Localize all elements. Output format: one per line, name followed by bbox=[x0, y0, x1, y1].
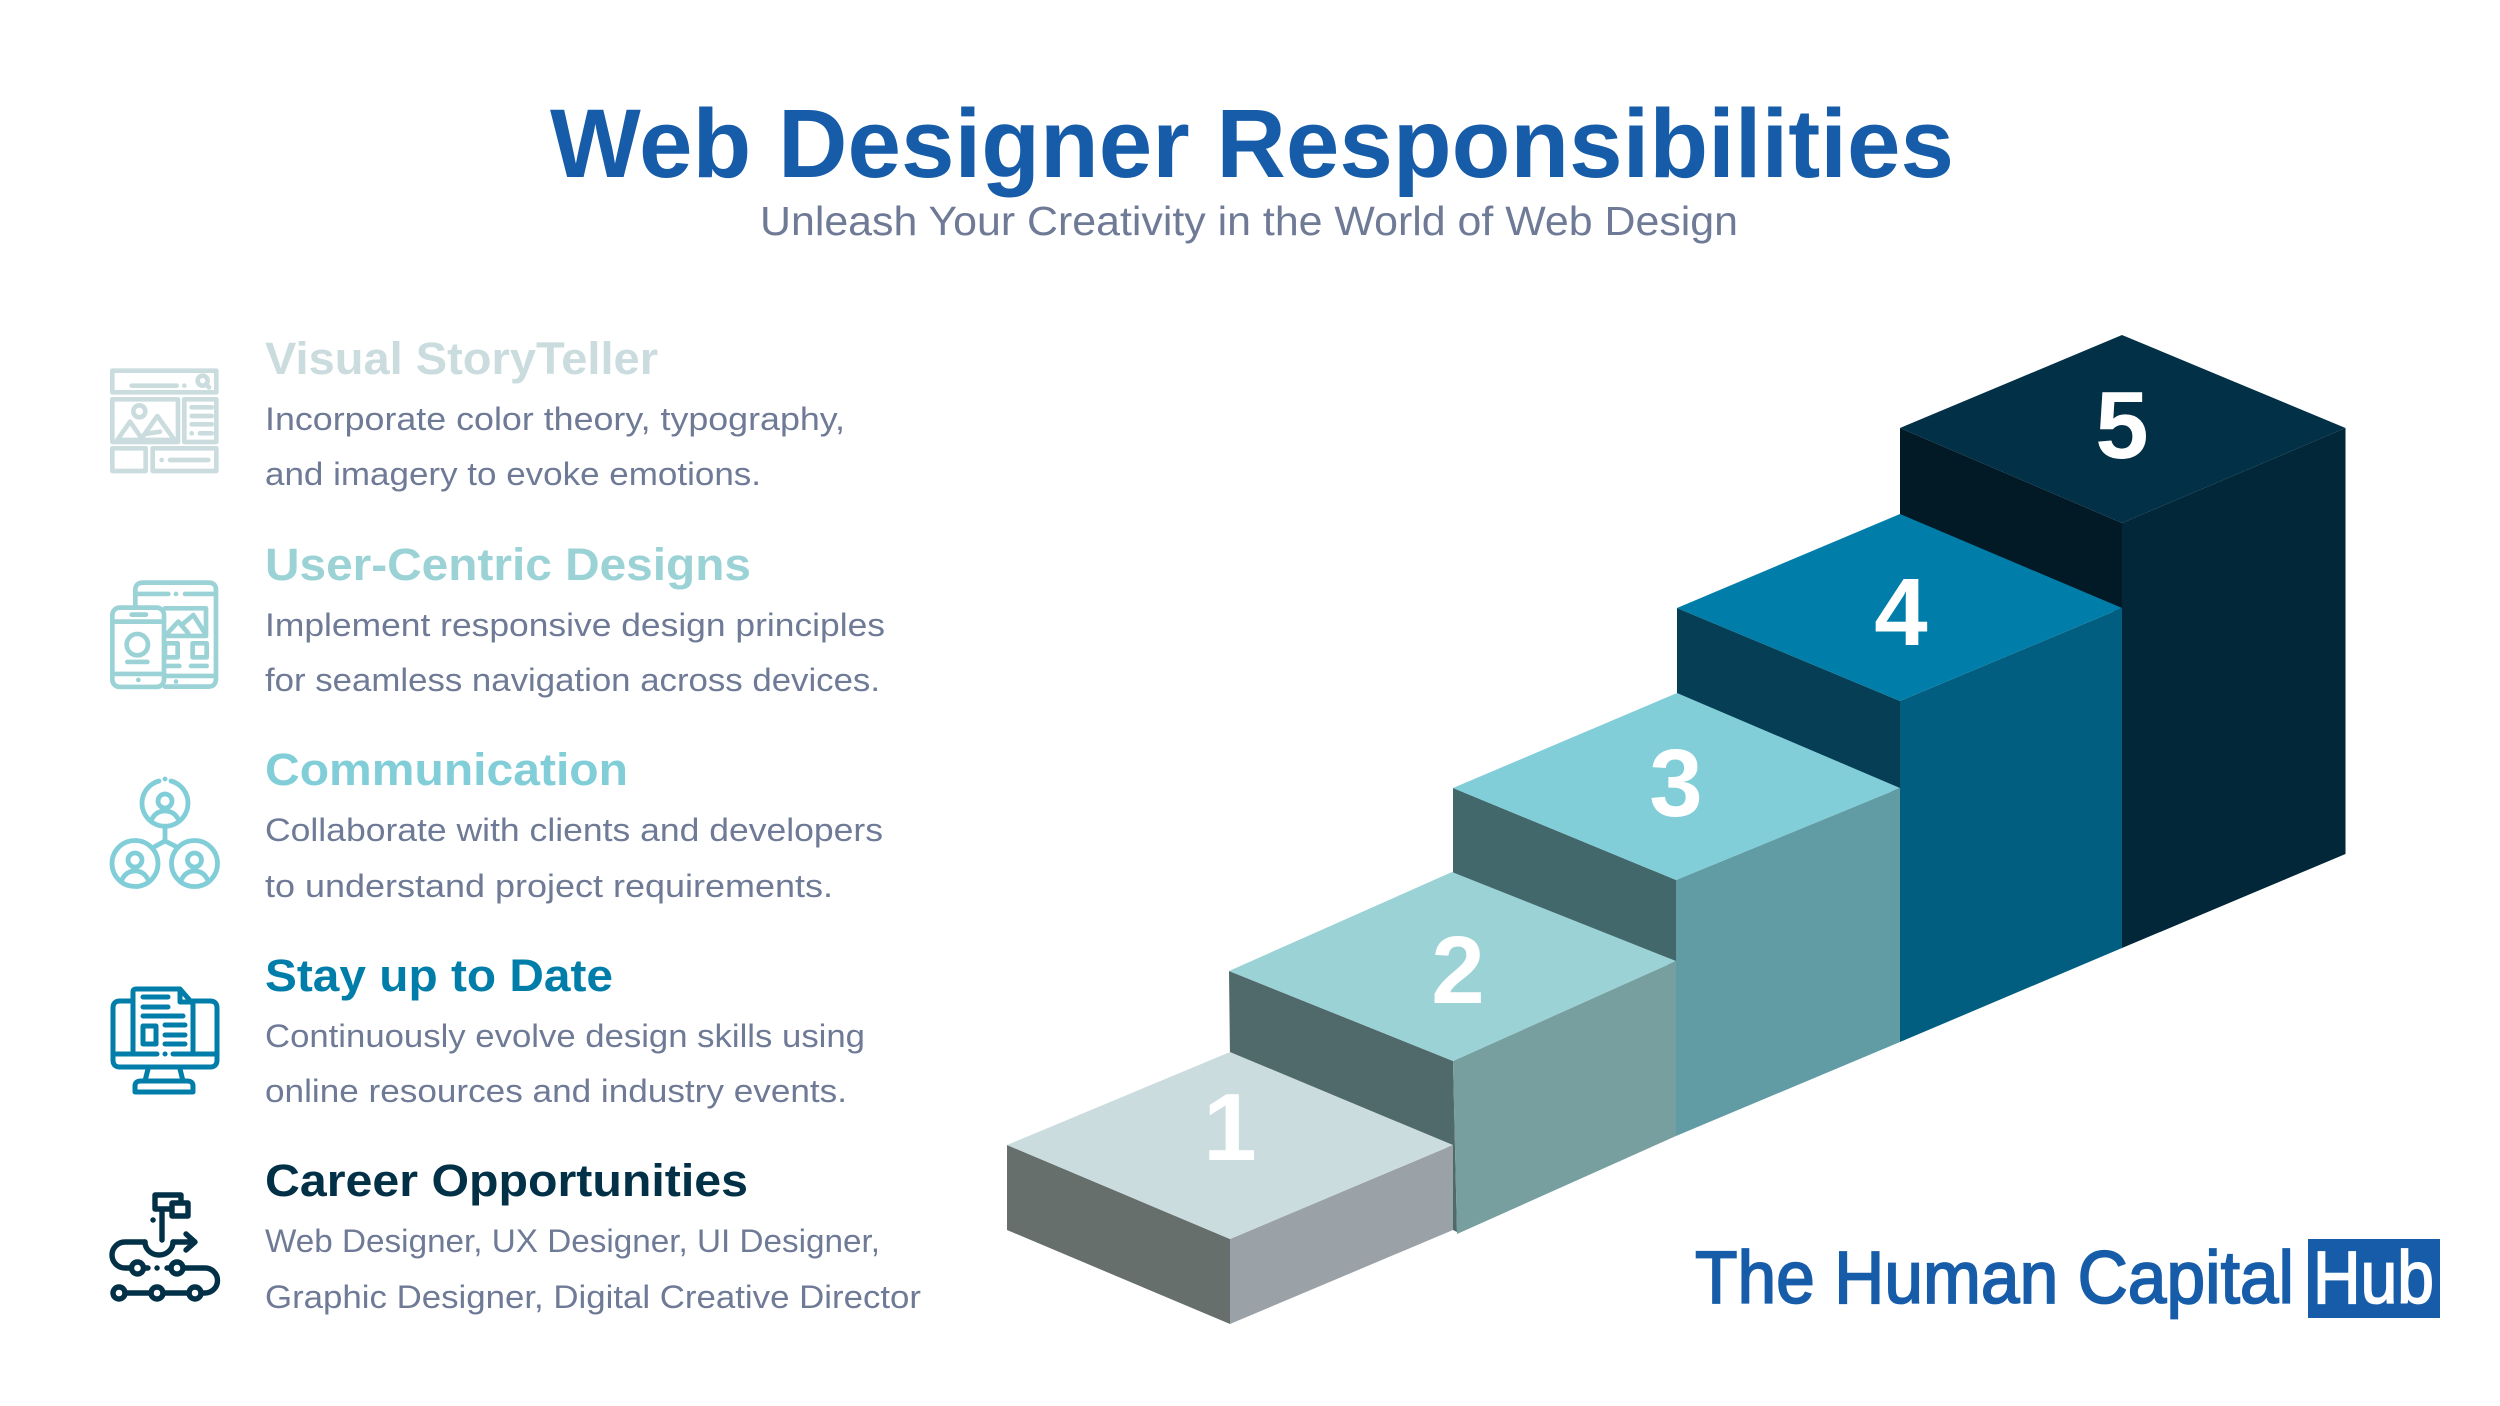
panel: visual storyteller bbox=[112, 333, 845, 492]
step 2 bbox=[1229, 872, 1676, 1234]
heading: stay up to date: Stay up to Date bbox=[265, 950, 613, 1001]
icon: connected people bbox=[112, 779, 218, 886]
subtitle: Unleash Your Creativity in the World of Web Design bbox=[760, 198, 1738, 244]
icon: monitor with document bbox=[113, 989, 217, 1092]
description: career opportunities: Web Designer, UX Designer, UI Designer, bbox=[265, 1223, 880, 1259]
description: communication: to understand project requirements. bbox=[265, 868, 833, 904]
description: communication: Collaborate with clients and developers bbox=[265, 812, 883, 848]
title: Web Designer Responsibilities bbox=[550, 89, 1954, 198]
description: stay up to date: Continuously evolve design skills using bbox=[265, 1018, 865, 1054]
step 5 bbox=[1900, 335, 2346, 948]
description: visual storyteller: Incorporate color theory, typography, bbox=[265, 401, 845, 437]
isometric staircase chart bbox=[1007, 335, 2346, 1324]
description: career opportunities: Graphic Designer, Digital Creative Director bbox=[265, 1279, 921, 1315]
description: stay up to date: online resources and industry events. bbox=[265, 1073, 847, 1109]
step 3: 3 bbox=[1649, 730, 1703, 837]
logo: The Human Capital Hub: The Human Capital bbox=[1695, 1236, 2294, 1319]
heading: visual storyteller: Visual StoryTeller bbox=[265, 333, 658, 384]
description: visual storyteller: and imagery to evoke emotions. bbox=[265, 456, 761, 492]
description: communication bbox=[265, 812, 883, 904]
step 2: 2 bbox=[1431, 917, 1485, 1024]
icon: responsive devices bbox=[112, 583, 216, 687]
step 3 bbox=[1453, 693, 1900, 1136]
panel: communication bbox=[112, 744, 883, 904]
heading: career opportunities: Career Opportunities bbox=[265, 1155, 748, 1206]
step 5: 5 bbox=[2095, 372, 2149, 479]
panel: user-centric designs bbox=[112, 539, 885, 698]
description: user-centric designs: for seamless navigation across devices. bbox=[265, 662, 880, 698]
panel: stay up to date bbox=[113, 950, 865, 1109]
icon: web layout wireframe bbox=[112, 371, 216, 471]
step 4 bbox=[1677, 514, 2122, 1042]
step 1 bbox=[1007, 1052, 1453, 1324]
heading: communication: Communication bbox=[265, 744, 628, 795]
logo: The Human Capital Hub: Hub bbox=[2313, 1236, 2434, 1319]
description: career opportunities bbox=[265, 1223, 921, 1315]
icon: career path with flag bbox=[112, 1195, 218, 1299]
step 4: 4 bbox=[1874, 559, 1928, 666]
description: visual storyteller bbox=[265, 401, 845, 492]
panel: career opportunities bbox=[112, 1155, 921, 1315]
step 1: 1 bbox=[1203, 1074, 1257, 1181]
description: stay up to date bbox=[265, 1018, 865, 1109]
heading: user-centric designs: User-Centric Designs bbox=[265, 539, 751, 590]
description: user-centric designs: Implement responsive design principles bbox=[265, 607, 885, 643]
description: user-centric designs bbox=[265, 607, 885, 698]
